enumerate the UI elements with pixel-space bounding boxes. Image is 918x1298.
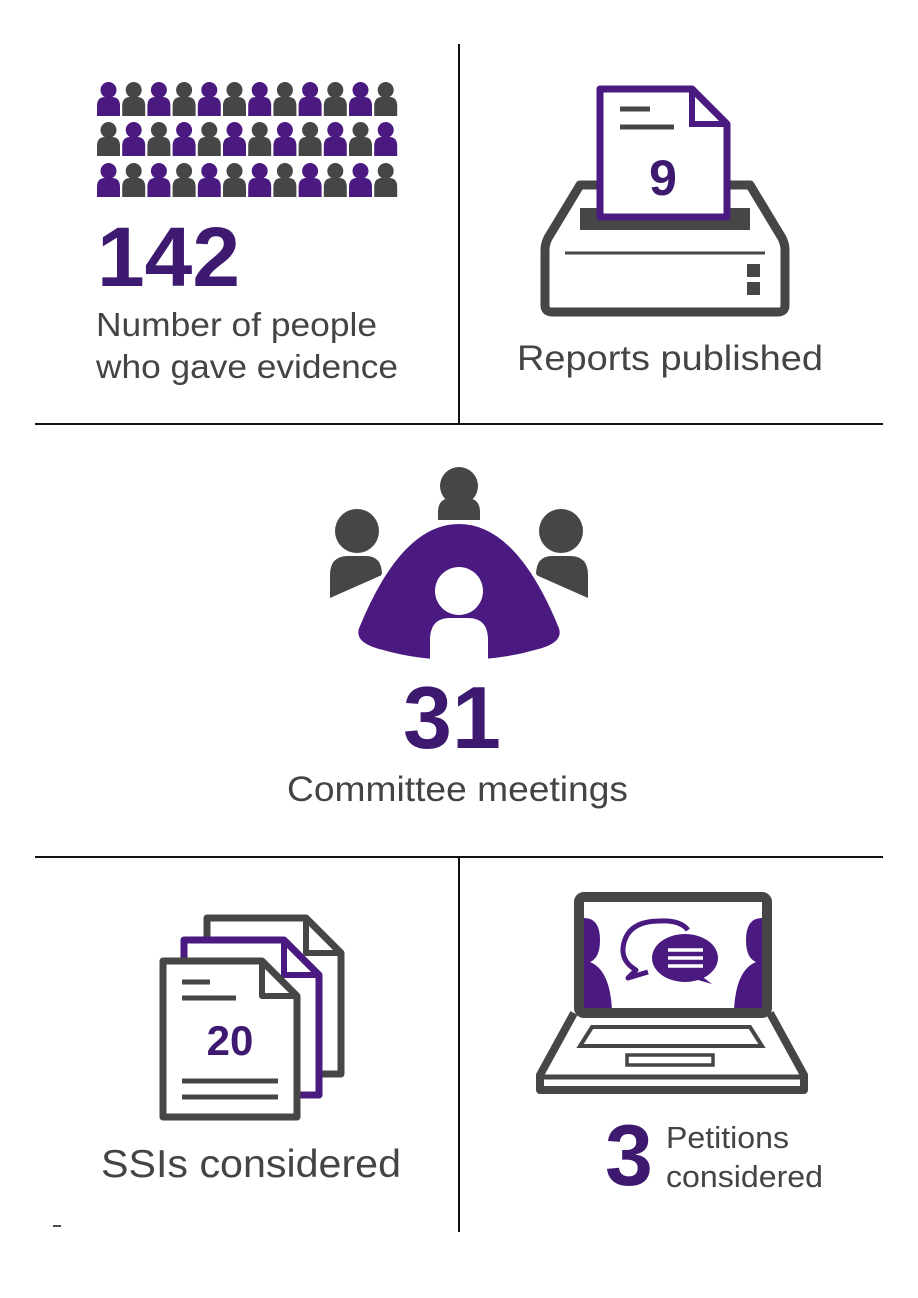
label: petitions considered: considered — [666, 1159, 823, 1194]
icon: laptop with petitions — [540, 897, 804, 1090]
label: number of people: Number of people — [96, 306, 377, 343]
number: 20: 20 — [207, 1017, 253, 1064]
label: committee meetings: Committee meetings — [287, 770, 628, 809]
label: SSIs considered: SSIs considered — [101, 1143, 401, 1186]
icon: printer with report — [545, 89, 785, 312]
number: 9: 9 — [649, 150, 677, 206]
number: 142: 142 — [97, 210, 240, 304]
number: 31: 31 — [403, 668, 501, 767]
icon: committee meeting — [330, 467, 588, 662]
label: petitions considered: Petitions — [666, 1120, 789, 1155]
label: number of people: who gave evidence — [95, 348, 398, 385]
icon: SSI documents — [163, 918, 341, 1117]
number: 3: 3 — [605, 1108, 653, 1204]
label: reports published: Reports published — [517, 339, 823, 378]
icon: people grid — [97, 82, 397, 197]
